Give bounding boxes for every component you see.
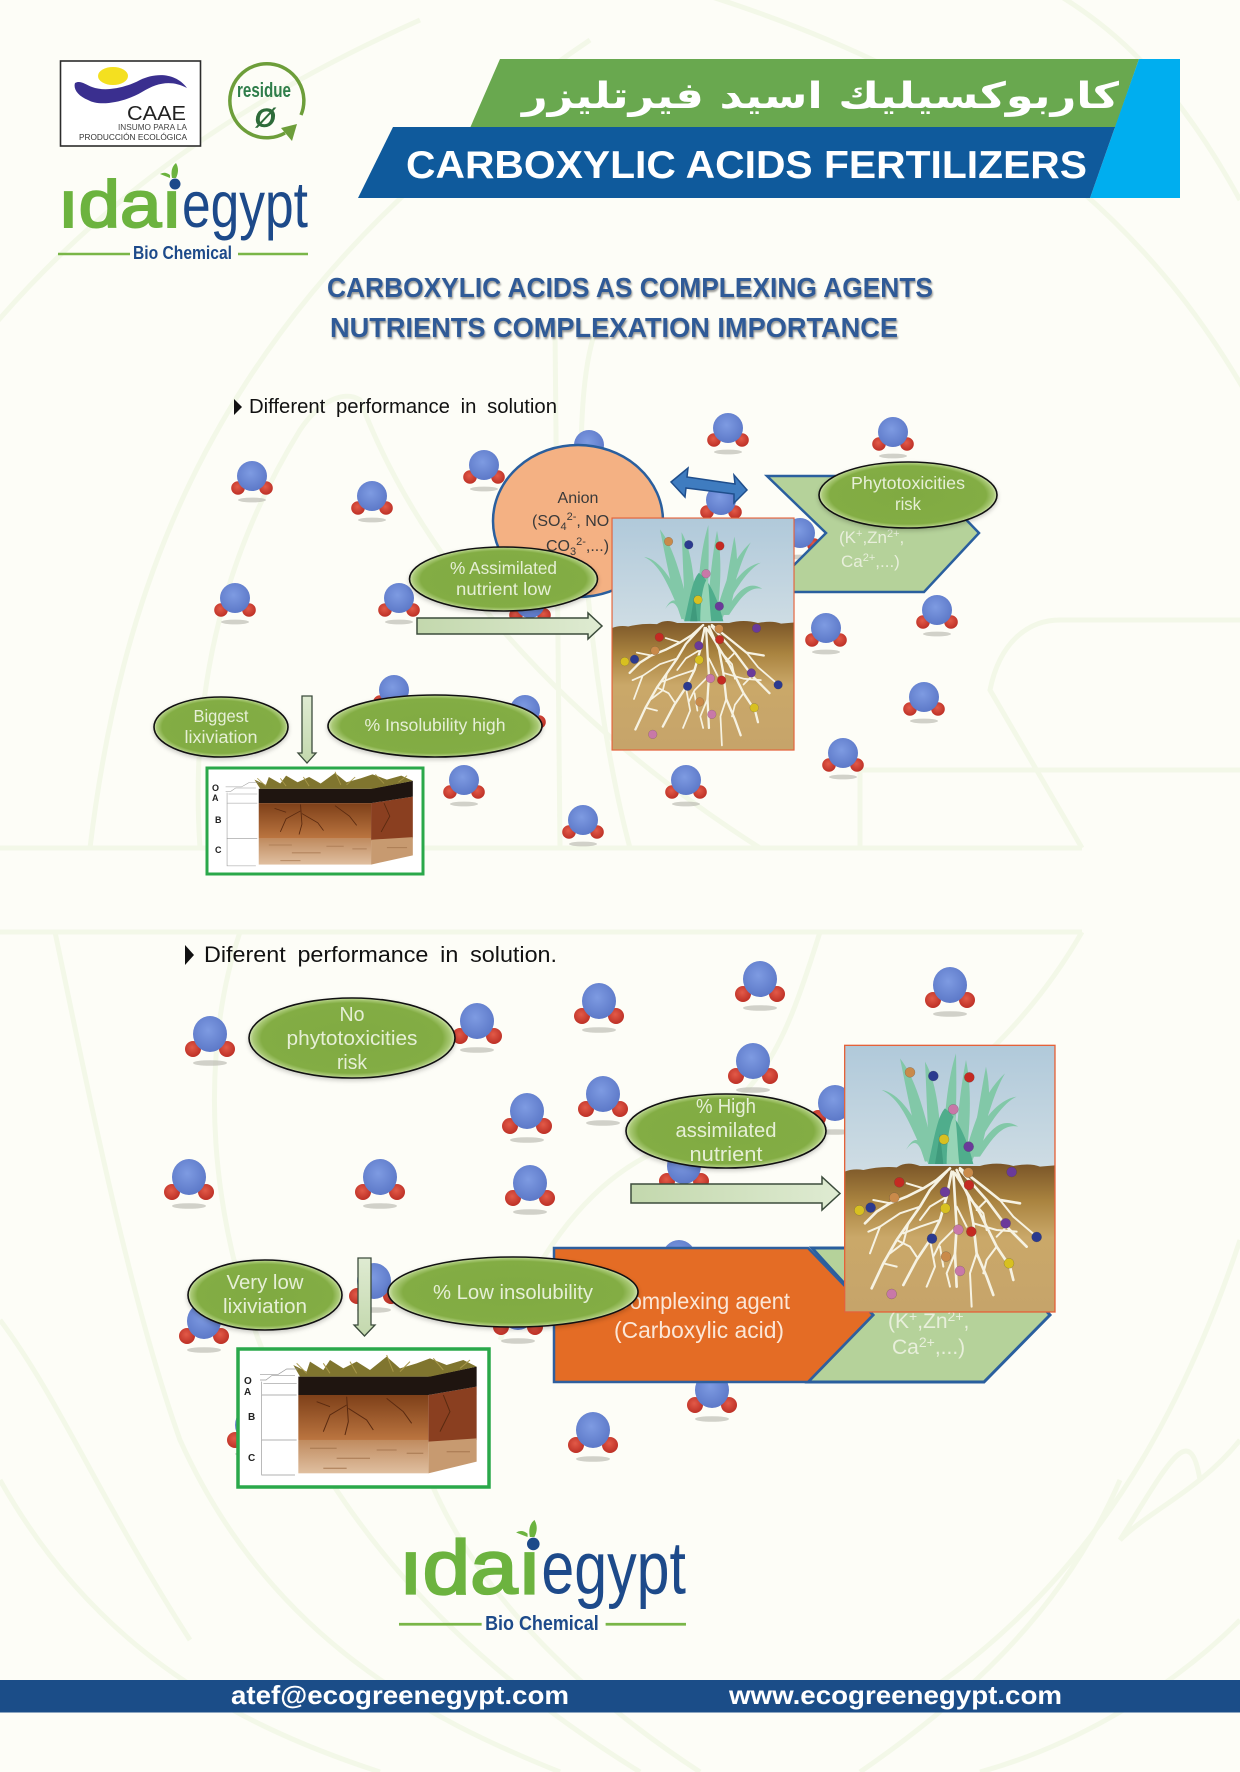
phytotoxicities risk ellipse: Phytotoxicities xyxy=(851,473,965,493)
no phytotoxicities risk ellipse: No xyxy=(340,1003,364,1026)
anion ellipse: 3 xyxy=(570,546,576,558)
assimilated nutrient low ellipse: % Assimilated xyxy=(450,558,557,578)
heading: CARBOXYLIC ACIDS AS COMPLEXING AGENTS xyxy=(327,272,933,303)
high assimilated nutrient ellipse: assimilated xyxy=(676,1119,776,1142)
company logo top: egypt xyxy=(182,168,308,241)
footer contact band xyxy=(0,1680,1240,1712)
soil profile frame 1: B xyxy=(215,815,222,825)
title banner xyxy=(358,59,1180,198)
arrow down to soil 1 xyxy=(298,696,316,763)
soil profile frame 1: A xyxy=(212,793,219,803)
CAAE certification logo: PRODUCCIÓN ECOLÓGICA xyxy=(79,133,188,142)
section 2 bullet heading: Diferent performance in solution. xyxy=(204,942,557,967)
assimilated nutrient low ellipse: nutrient low xyxy=(456,579,551,599)
section 1 bullet heading: Different performance in solution xyxy=(249,396,557,418)
cation chevron: (K xyxy=(839,528,856,547)
company logo bottom xyxy=(399,1520,686,1635)
no phytotoxicities risk ellipse xyxy=(249,998,455,1078)
CAAE certification logo: INSUMO PARA LA xyxy=(118,123,188,132)
complexing agent pentagon: (Carboxylic acid) xyxy=(614,1317,784,1343)
cation chevron xyxy=(767,476,979,592)
arrow to plant 1 xyxy=(417,613,602,639)
cation chevron: 2+ xyxy=(887,528,900,540)
cation chevron: + xyxy=(856,528,862,540)
cation chevron 2: 2+ xyxy=(948,1308,964,1324)
residue zero badge: residue xyxy=(237,80,291,102)
anion ellipse xyxy=(493,445,663,597)
low insolubility ellipse: % Low insolubility xyxy=(433,1281,594,1304)
anion ellipse: 2- xyxy=(576,536,586,548)
cation chevron: 2+ xyxy=(863,552,875,564)
insolubility high ellipse xyxy=(328,695,542,757)
no phytotoxicities risk ellipse: risk xyxy=(337,1051,368,1074)
cation chevron 2: , xyxy=(964,1310,969,1333)
very low lixiviation ellipse: Very low xyxy=(226,1271,304,1294)
complexing agent pentagon xyxy=(554,1248,873,1382)
anion ellipse: 4 xyxy=(560,521,567,533)
high assimilated nutrient ellipse: nutrient xyxy=(690,1143,763,1166)
double arrow exchange xyxy=(671,468,747,503)
anion ellipse: 2- xyxy=(567,511,577,523)
soil profile frame 1: C xyxy=(215,845,222,855)
cation chevron: ,...) xyxy=(875,552,900,571)
plant and roots illustration 2 xyxy=(845,1045,1055,1312)
very low lixiviation ellipse xyxy=(188,1260,342,1330)
heading: NUTRIENTS COMPLEXATION IMPORTANCE xyxy=(330,312,898,343)
company logo top: ıdaı xyxy=(58,167,182,241)
biggest lixiviation ellipse: Biggest xyxy=(194,706,249,726)
soil profile frame 1: O xyxy=(212,783,219,793)
phytotoxicities risk ellipse: risk xyxy=(895,494,921,514)
soil profile frame 2: A xyxy=(244,1387,251,1398)
high assimilated nutrient ellipse: % High xyxy=(696,1095,756,1118)
high assimilated nutrient ellipse xyxy=(626,1094,826,1168)
anion ellipse: ,...) xyxy=(586,538,609,555)
company logo bottom: Bio Chemical xyxy=(485,1612,599,1635)
company logo top: Bio Chemical xyxy=(133,243,232,263)
very low lixiviation ellipse: lixiviation xyxy=(223,1295,307,1318)
CAAE certification logo xyxy=(60,61,200,146)
phytotoxicities risk ellipse xyxy=(819,462,997,528)
biggest lixiviation ellipse: lixiviation xyxy=(184,727,258,747)
insolubility high ellipse: % Insolubility high xyxy=(364,715,506,735)
soil profile frame 2: O xyxy=(244,1376,252,1387)
plant and roots illustration 1 xyxy=(612,518,794,750)
residue zero badge: Ø xyxy=(254,103,276,133)
heading xyxy=(327,272,933,343)
biggest lixiviation ellipse xyxy=(154,697,288,757)
title banner: CARBOXYLIC ACIDS FERTILIZERS xyxy=(406,144,1087,187)
cation chevron 2: + xyxy=(909,1308,917,1324)
section 2 water molecules xyxy=(164,961,975,1462)
cation chevron: , xyxy=(900,528,904,547)
cation chevron 2: (K xyxy=(888,1310,909,1333)
low insolubility ellipse xyxy=(388,1257,638,1327)
footer contact band: atef@ecogreenegypt.com xyxy=(231,1680,569,1710)
complexing agent pentagon: Complexing agent xyxy=(614,1288,791,1314)
CAAE certification logo: CAAE xyxy=(127,103,186,125)
arrow to plant 2 xyxy=(631,1177,840,1210)
company logo bottom: egypt xyxy=(541,1525,686,1609)
cation chevron 2: 2+ xyxy=(919,1334,935,1350)
cation chevron 2 xyxy=(808,1248,1050,1382)
soil profile frame 2: C xyxy=(248,1453,255,1464)
title banner: كاربوكسيليك اسيد فيرتليزر xyxy=(520,76,1119,117)
cation chevron 2: ,...) xyxy=(935,1336,965,1359)
soil profile frame 2 xyxy=(238,1349,489,1487)
anion ellipse: CO xyxy=(546,538,570,555)
no phytotoxicities risk ellipse: phytotoxicities xyxy=(286,1027,418,1050)
company logo top xyxy=(58,163,308,263)
cation chevron: ,Zn xyxy=(862,528,887,547)
anion ellipse: (SO xyxy=(532,513,560,530)
footer contact band: www.ecogreenegypt.com xyxy=(728,1680,1062,1710)
residue zero badge xyxy=(230,64,304,141)
cation chevron 2: Ca xyxy=(892,1336,919,1359)
soil profile frame 2: B xyxy=(248,1412,255,1423)
cation chevron 2: ,Zn xyxy=(917,1310,948,1333)
arrow down to soil 2 xyxy=(354,1258,375,1336)
cation chevron: Ca xyxy=(841,552,863,571)
assimilated nutrient low ellipse xyxy=(410,547,598,611)
anion ellipse: Anion xyxy=(558,490,598,507)
soil profile frame 1 xyxy=(207,768,423,874)
section 1 water molecules xyxy=(214,413,958,846)
company logo bottom: ıdaı xyxy=(399,1525,541,1610)
anion ellipse: , NO xyxy=(576,513,609,530)
